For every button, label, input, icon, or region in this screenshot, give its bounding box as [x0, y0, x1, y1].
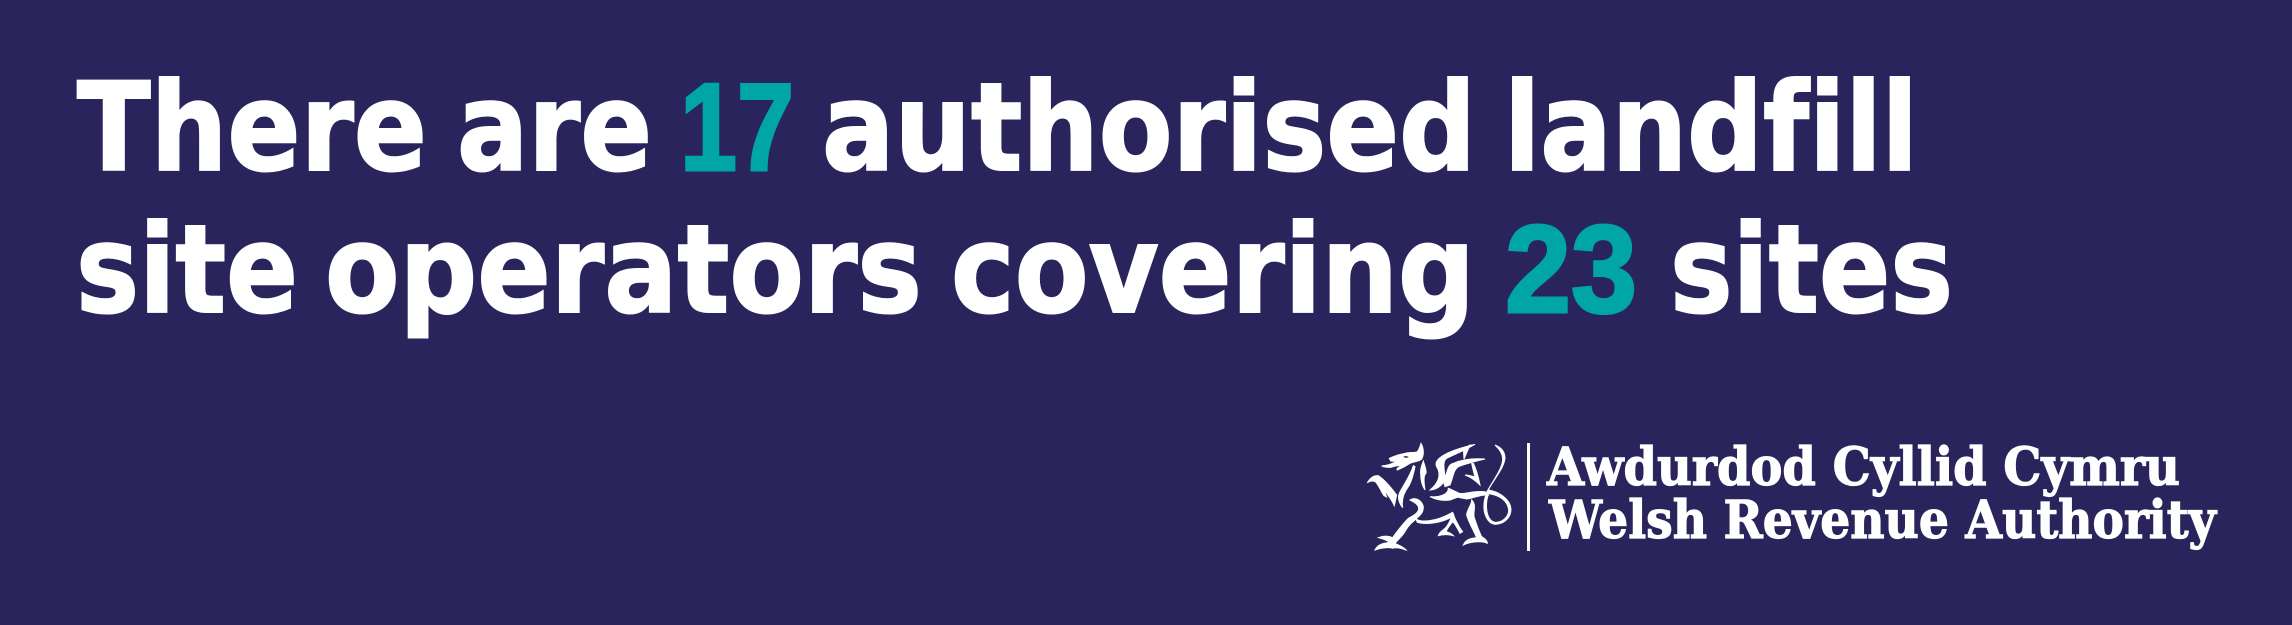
logo: Welsh Revenue Authority: [1367, 437, 2218, 551]
heading line 2: [76, 199, 1953, 341]
divider: [1527, 443, 1530, 551]
tail: [1484, 445, 1511, 524]
heading line 1: authorised: [822, 57, 1476, 199]
hindquarters: [1453, 491, 1488, 499]
neck: [1399, 461, 1426, 508]
far hind leg: [1438, 513, 1463, 536]
wordmark English name: Welsh Revenue Authority: [1548, 490, 2218, 551]
eye: [1403, 456, 1409, 458]
heading: [76, 57, 1953, 341]
heading line 2: sites: [1670, 199, 1953, 341]
heading line 2: covering: [951, 199, 1475, 341]
raised forelegs: [1367, 476, 1397, 506]
heading line 2: site: [76, 199, 298, 341]
chest and front leg: [1375, 499, 1423, 550]
belly: [1416, 512, 1454, 523]
head: [1382, 443, 1423, 470]
icon: Welsh dragon: [1367, 443, 1511, 550]
heading line 1: There: [77, 57, 427, 199]
heading line 1: 17: [680, 59, 794, 197]
heading line 1: are: [457, 57, 652, 199]
front claw: [1378, 536, 1393, 542]
near hind leg: [1463, 500, 1487, 545]
wordmark Welsh name: Awdurdod Cyllid Cymru: [1546, 437, 2180, 498]
heading line 2: operators: [325, 199, 922, 341]
wings: [1430, 444, 1485, 500]
rear half of dragon: [1430, 444, 1511, 545]
heading line 1: landfill: [1504, 57, 1918, 199]
heading line 1: [77, 57, 1918, 199]
heading line 2: 23: [1505, 201, 1637, 339]
